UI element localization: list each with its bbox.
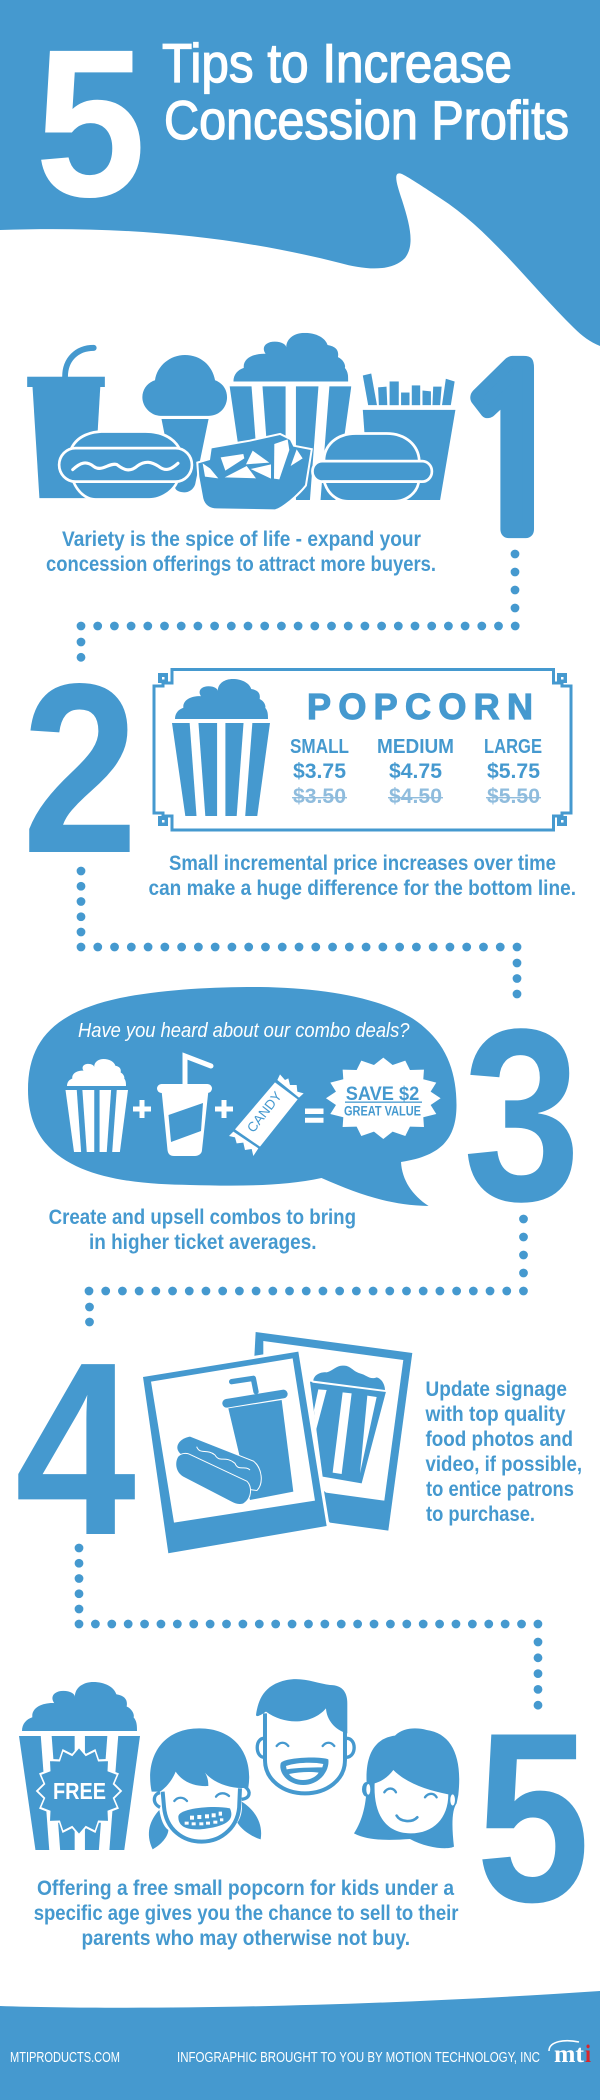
- footer website: MTIPRODUCTS.COM: [10, 2049, 120, 2066]
- tip 2 caption: [148, 852, 576, 900]
- tip 5 caption: parents who may otherwise not buy.: [82, 1927, 410, 1950]
- price column: medium: $4.50: [389, 785, 442, 808]
- tip 5 caption: Offering a free small popcorn for kids under a: [37, 1877, 454, 1900]
- title numeral: 5: [35, 5, 146, 241]
- panel: combo speech bubble: [28, 987, 456, 1206]
- bubble question: Have you heard about our combo deals?: [78, 1020, 410, 1042]
- icon: photo prints: [143, 1332, 412, 1553]
- icon: ice cream: [142, 355, 227, 492]
- price column: medium: MEDIUM: [377, 736, 454, 758]
- badge: save $2: SAVE $2: [346, 1083, 419, 1105]
- free badge: FREE: [53, 1778, 106, 1804]
- plus sign: [215, 1100, 233, 1118]
- plus sign: [133, 1100, 151, 1118]
- icon: soda cup: [27, 348, 105, 498]
- tip 3 caption: in higher ticket averages.: [89, 1231, 316, 1254]
- icon: free popcorn: [19, 1682, 140, 1850]
- dotted connector 2 to 3: [81, 871, 517, 994]
- tip 4 caption: to entice patrons: [426, 1478, 574, 1501]
- footer band: [0, 1991, 600, 2100]
- title text: [162, 32, 569, 151]
- icon: fries: [363, 374, 455, 500]
- tip 4 caption: to purchase.: [426, 1503, 535, 1526]
- panel: popcorn price sign: [154, 670, 571, 830]
- logo: mti: i: [585, 2041, 591, 2068]
- icon: candy bar: CANDY: [244, 1089, 285, 1135]
- tip 1 caption: Variety is the spice of life - expand your: [62, 528, 421, 551]
- tip 4 caption: [425, 1378, 582, 1526]
- price column: large: [484, 736, 542, 808]
- icon: nachos: [198, 435, 311, 509]
- dotted connector 3 to 4: [89, 1219, 524, 1322]
- price column: large: LARGE: [484, 736, 542, 758]
- price column: medium: $4.75: [389, 760, 442, 783]
- icon: popcorn: [172, 679, 270, 816]
- icon: hot dog: [60, 433, 191, 498]
- numeral 2: 2: [22, 634, 138, 904]
- face: father: [256, 1679, 354, 1793]
- dotted connector 1 to 2: [81, 554, 515, 657]
- badge: save $2: [326, 1058, 441, 1139]
- tip 1 food icons: [27, 333, 455, 509]
- price column: small: [290, 736, 349, 808]
- tip 4 caption: Update signage: [426, 1378, 567, 1401]
- tip 4 caption: video, if possible,: [426, 1453, 582, 1476]
- dotted connector 4 to 5: [79, 1548, 538, 1705]
- tip 1 caption: concession offerings to attract more buyers.: [46, 553, 436, 576]
- equals sign: [305, 1108, 324, 1123]
- numeral 1: 1: [449, 344, 576, 566]
- back photo with popcorn: [250, 1332, 412, 1531]
- header banner: [0, 0, 600, 346]
- tip 2 caption: Small incremental price increases over time: [169, 852, 556, 875]
- icon: popcorn: [66, 1059, 128, 1152]
- tip 3 caption: [49, 1206, 356, 1254]
- face: girl with pigtails: [149, 1728, 261, 1849]
- logo: mti: [549, 2041, 591, 2068]
- price column: medium: [377, 736, 454, 808]
- tip 1 caption: [46, 528, 436, 576]
- badge: save $2: GREAT VALUE: [344, 1104, 421, 1119]
- tip 5 caption: specific age gives you the chance to sell to their: [34, 1902, 458, 1925]
- tip 3 caption: Create and upsell combos to bring: [49, 1206, 356, 1229]
- numeral 3: 3: [463, 978, 581, 1253]
- price column: large: $5.50: [487, 785, 540, 808]
- price column: small: $3.75: [293, 760, 346, 783]
- icon: popcorn: [230, 333, 351, 500]
- illustration: family faces: [149, 1679, 459, 1849]
- logo: mti: mt: [554, 2041, 585, 2068]
- tip 4 caption: with top quality: [425, 1403, 566, 1426]
- price column: small: $3.50: [293, 785, 346, 808]
- sign frame: [154, 670, 571, 830]
- tip 4 caption: food photos and: [426, 1428, 573, 1451]
- tip 5 caption: [34, 1877, 458, 1950]
- face: mother: [354, 1728, 459, 1848]
- title text: Tips to Increase: [162, 32, 512, 94]
- front photo with drink and hot dog: [143, 1352, 327, 1553]
- icon: burger: [314, 435, 431, 500]
- free badge: [37, 1747, 121, 1835]
- numeral 4: 4: [15, 1311, 136, 1587]
- icon: candy bar: [229, 1074, 304, 1156]
- price column: small: SMALL: [290, 736, 349, 758]
- sign heading: POPCORN: [307, 686, 533, 727]
- icon: drink: [157, 1056, 212, 1156]
- price column: large: $5.75: [487, 760, 540, 783]
